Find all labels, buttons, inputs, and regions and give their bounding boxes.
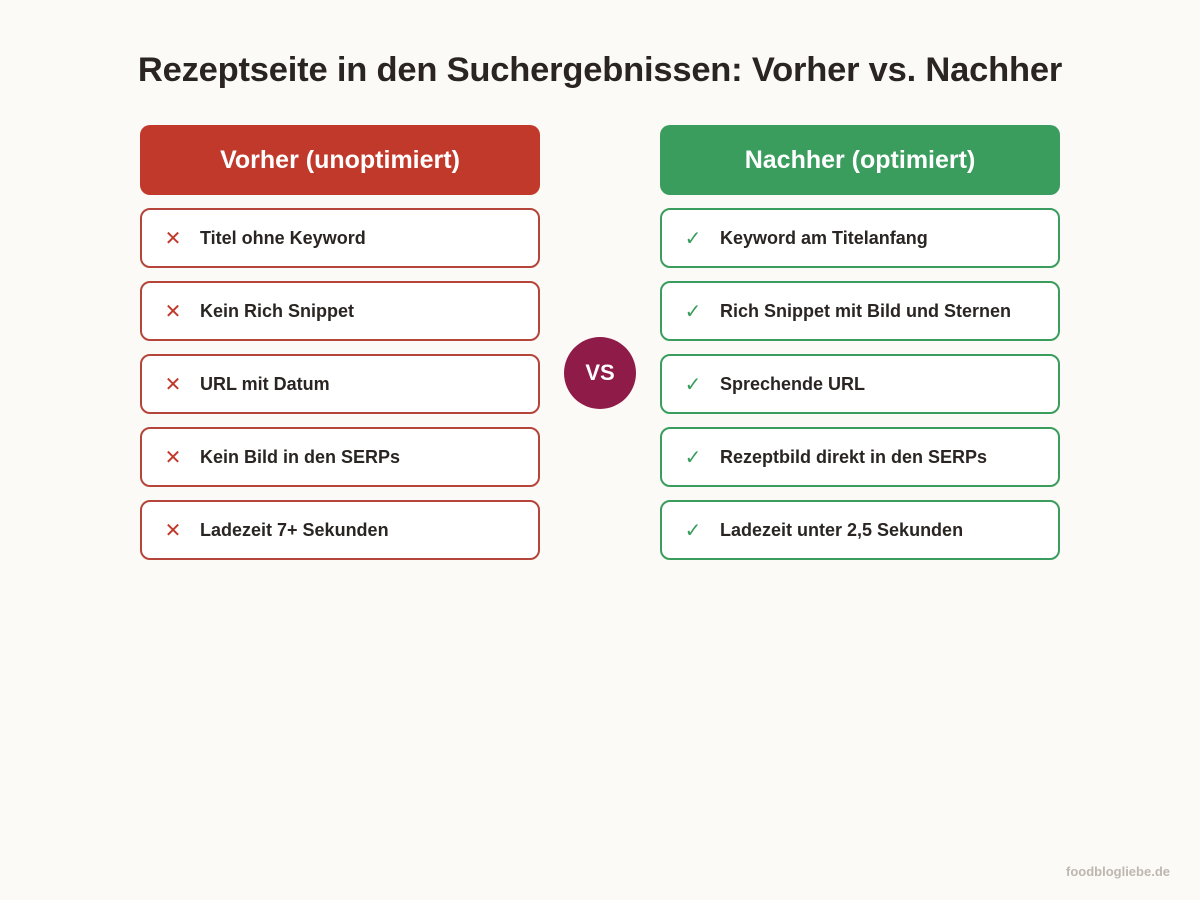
item 2: ✕ — [165, 300, 181, 322]
header: vorher — [140, 125, 540, 195]
item 1: Titel ohne Keyword — [200, 228, 366, 248]
item 4: Kein Bild in den SERPs — [200, 446, 400, 466]
item 4 — [140, 427, 540, 487]
item 3: Sprechende URL — [720, 374, 865, 394]
item 5 — [140, 500, 540, 560]
item 4: ✓ — [685, 446, 701, 468]
item 2 — [140, 281, 540, 341]
item 1: ✕ — [165, 228, 181, 250]
item 1: Keyword am Titelanfang — [720, 228, 928, 248]
item 4 — [660, 427, 1060, 487]
vs badge: VS — [585, 360, 615, 385]
item 3: ✓ — [685, 374, 701, 396]
item 3: ✕ — [165, 374, 181, 396]
item 2: Kein Rich Snippet — [200, 300, 354, 320]
header: vorher: Vorher (unoptimiert) — [220, 146, 460, 174]
header: nachher: Nachher (optimiert) — [745, 146, 975, 174]
item 3 — [140, 354, 540, 414]
item 2: ✓ — [685, 300, 701, 322]
item 5: Ladezeit 7+ Sekunden — [200, 520, 389, 540]
item 4: Rezeptbild direkt in den SERPs — [720, 446, 987, 466]
vs badge — [564, 337, 636, 409]
item 3 — [660, 354, 1060, 414]
header: nachher — [660, 125, 1060, 195]
footer: foodblogliebe.de — [1066, 864, 1170, 879]
panel: nachher — [660, 125, 1060, 560]
item 1 — [660, 208, 1060, 268]
item 1 — [140, 208, 540, 268]
item 1: ✓ — [685, 228, 701, 250]
item 5: ✓ — [685, 520, 701, 542]
item 5: Ladezeit unter 2,5 Sekunden — [720, 520, 963, 540]
title: Rezeptseite in den Suchergebnissen: Vorher vs. Nachher — [138, 51, 1062, 89]
item 5 — [660, 500, 1060, 560]
item 2: Rich Snippet mit Bild und Sternen — [720, 300, 1011, 320]
item 5: ✕ — [165, 520, 181, 542]
item 2 — [660, 281, 1060, 341]
panel: vorher — [140, 125, 540, 560]
item 4: ✕ — [165, 446, 181, 468]
item 3: URL mit Datum — [200, 374, 330, 394]
